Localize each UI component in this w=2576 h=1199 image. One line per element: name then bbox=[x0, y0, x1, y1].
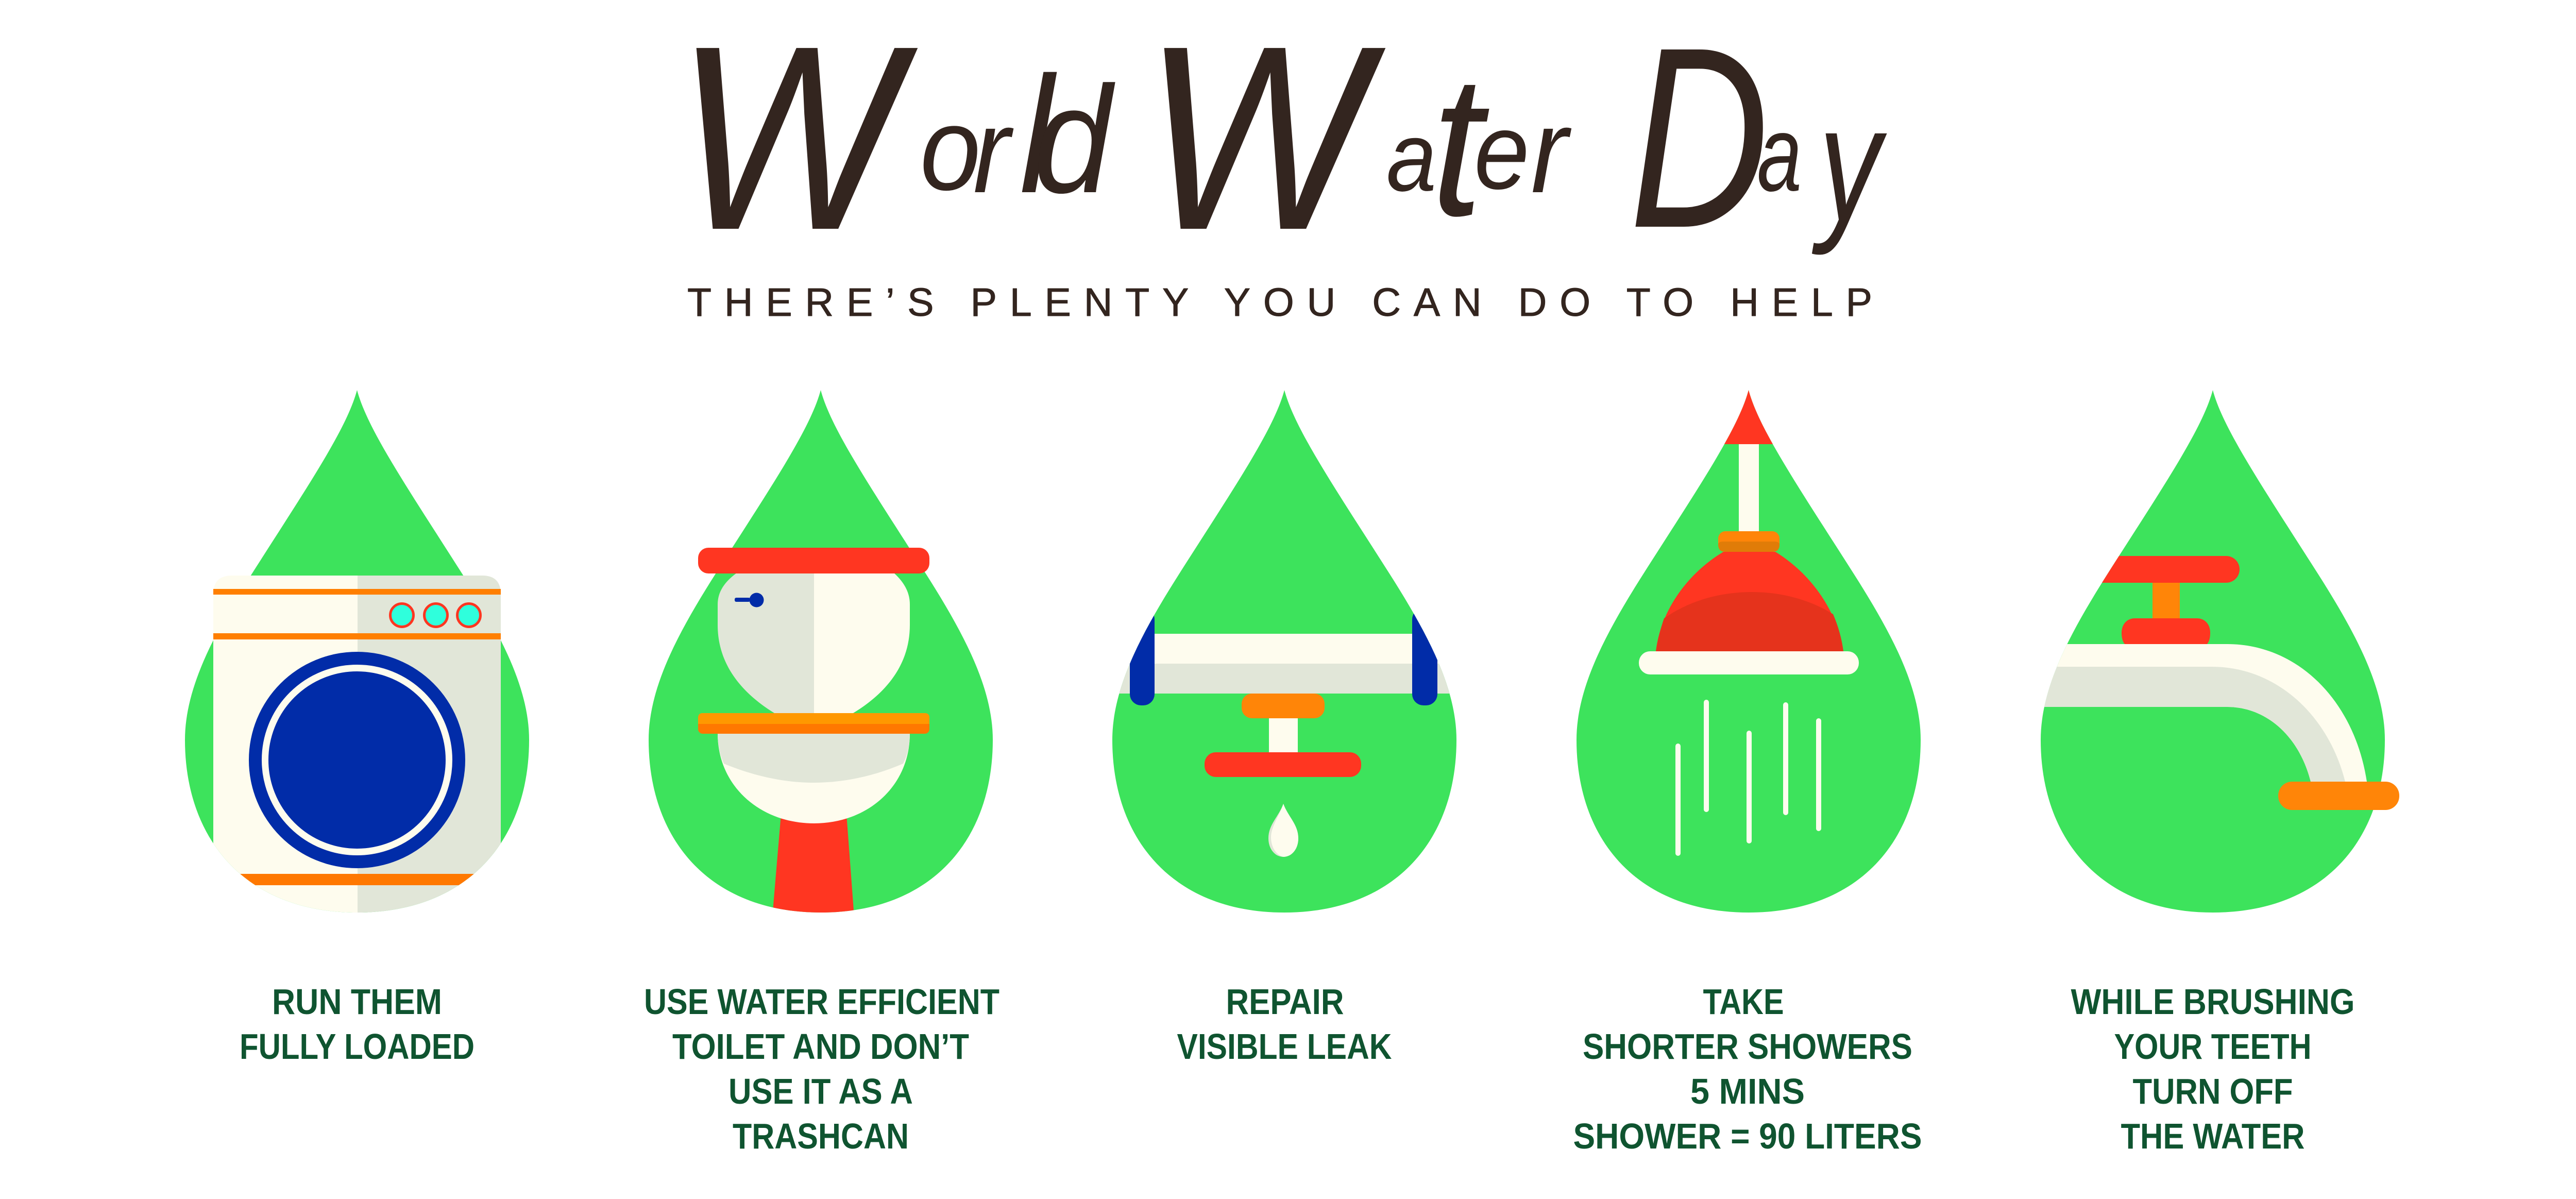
caption: while brushing teeth bbox=[2071, 982, 2354, 1156]
caption: shorter showers: 5 MINS bbox=[1690, 1071, 1805, 1111]
title: a bbox=[1386, 102, 1436, 212]
subtitle: THERE’S PLENTY YOU CAN DO TO HELP bbox=[687, 280, 1872, 325]
water drop 1 bbox=[185, 390, 529, 913]
title bbox=[676, 0, 1888, 284]
caption: while brushing teeth: YOUR TEETH bbox=[2114, 1026, 2311, 1067]
caption: run them fully loaded: RUN THEM bbox=[272, 982, 442, 1022]
title: a bbox=[1757, 94, 1802, 213]
caption: shorter showers: SHORTER SHOWERS bbox=[1583, 1026, 1912, 1067]
caption: run them fully loaded bbox=[240, 982, 474, 1067]
title: e bbox=[1474, 91, 1530, 212]
title: t bbox=[1431, 33, 1489, 258]
caption: repair visible leak: VISIBLE LEAK bbox=[1177, 1026, 1392, 1067]
caption: shorter showers bbox=[1573, 982, 1922, 1156]
icon: faucet bbox=[2009, 556, 2399, 810]
caption: run them fully loaded: FULLY LOADED bbox=[240, 1026, 474, 1067]
panel: shower bbox=[1573, 381, 1922, 1156]
caption: water efficient toilet: TRASHCAN bbox=[733, 1116, 909, 1156]
icon: leaking pipe bbox=[1108, 608, 1463, 857]
water drop 2 bbox=[649, 390, 993, 913]
water drop 5 bbox=[2041, 390, 2385, 913]
icon: washing machine bbox=[213, 576, 501, 917]
caption: water efficient toilet: USE WATER EFFICIENT bbox=[644, 982, 999, 1022]
caption: water efficient toilet bbox=[644, 982, 999, 1156]
caption: while brushing teeth: THE WATER bbox=[2121, 1116, 2305, 1156]
title: r bbox=[973, 84, 1014, 218]
caption: shorter showers: TAKE bbox=[1703, 982, 1784, 1022]
title: l bbox=[1020, 42, 1058, 228]
caption: shorter showers: SHOWER = 90 LITERS bbox=[1573, 1116, 1922, 1156]
title: D bbox=[1630, 0, 1769, 281]
panel: toilet bbox=[644, 390, 999, 1156]
water drop 3 bbox=[1112, 390, 1456, 913]
caption: repair visible leak: REPAIR bbox=[1226, 982, 1344, 1022]
title: r bbox=[1531, 84, 1572, 218]
title: d bbox=[1034, 55, 1117, 225]
caption: water efficient toilet: USE IT AS A bbox=[728, 1071, 913, 1111]
panel: washing machine bbox=[185, 390, 529, 1067]
icon: toilet bbox=[698, 548, 929, 917]
panel: leak bbox=[1108, 390, 1463, 1067]
icon: shower head bbox=[1639, 381, 1859, 856]
panel: faucet bbox=[2009, 390, 2399, 1156]
water drop 4 bbox=[1577, 390, 1921, 913]
caption: repair visible leak bbox=[1177, 982, 1392, 1067]
caption: while brushing teeth: TURN OFF bbox=[2133, 1071, 2293, 1111]
title: y bbox=[1811, 71, 1888, 257]
title: o bbox=[920, 82, 980, 215]
caption: water efficient toilet: TOILET AND DON’T bbox=[672, 1026, 969, 1067]
caption: while brushing teeth: WHILE BRUSHING bbox=[2071, 982, 2354, 1022]
